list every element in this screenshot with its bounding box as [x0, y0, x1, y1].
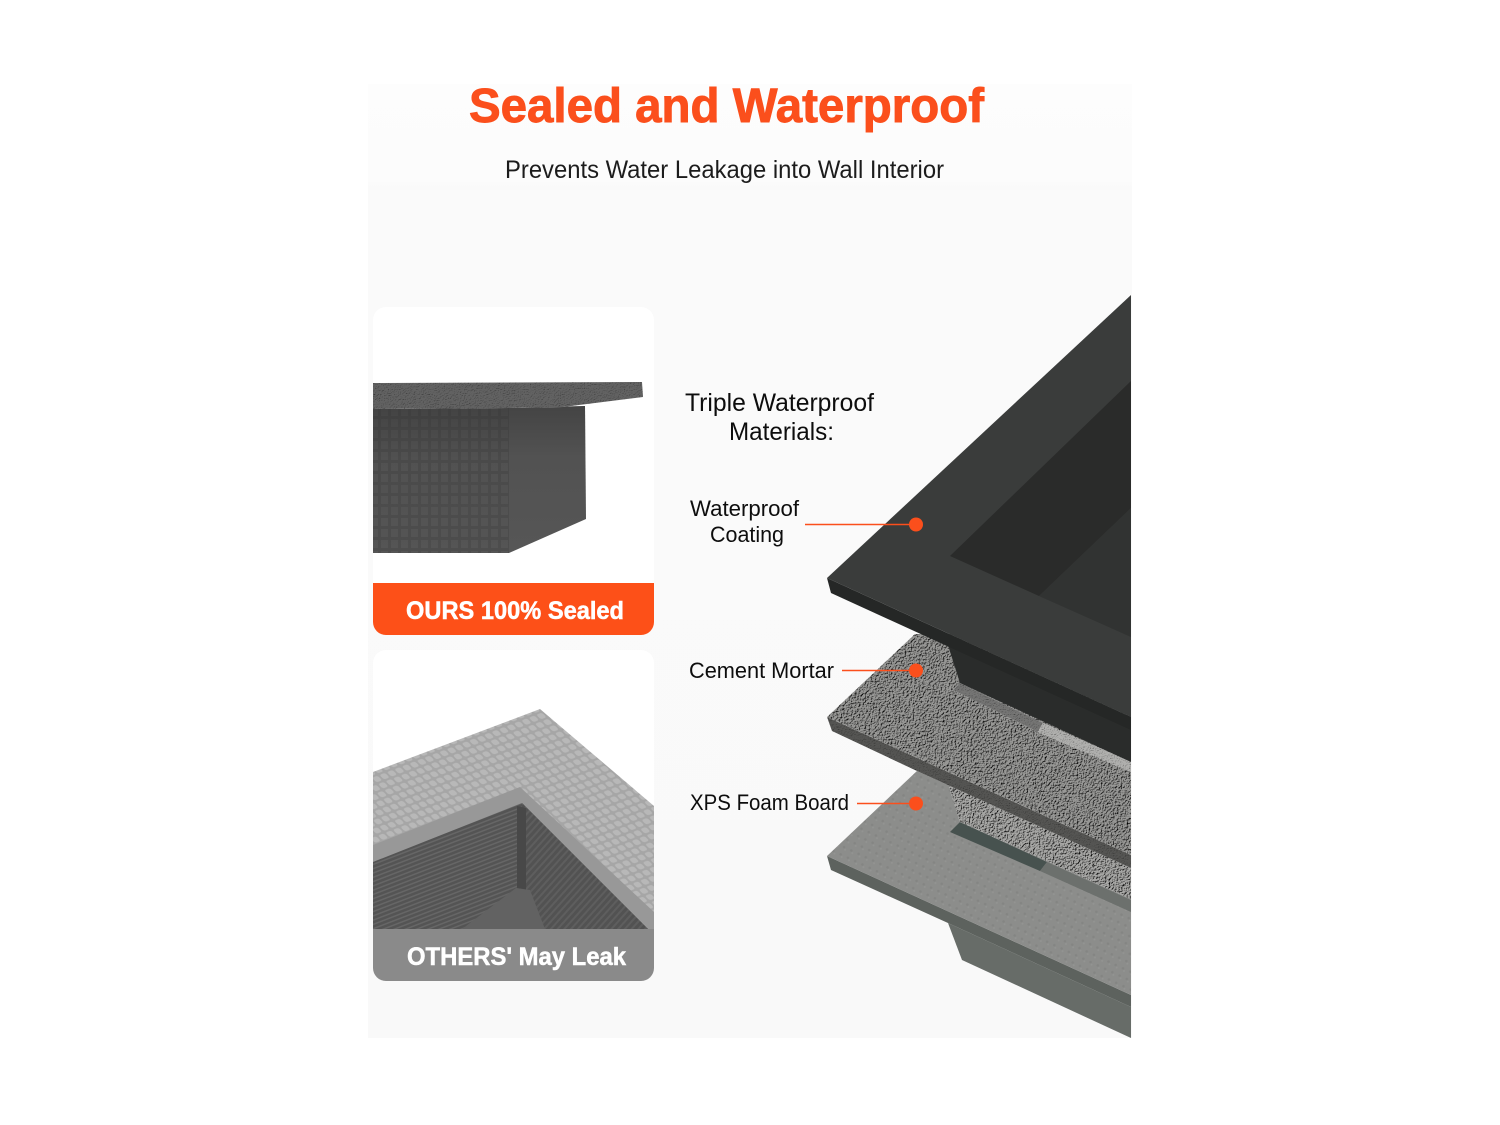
panel: others may leak	[373, 709, 654, 981]
grey caption bar	[373, 929, 654, 981]
exploded layer diagram	[827, 295, 1131, 1038]
heading: triple waterproof materials: Materials:	[729, 418, 834, 446]
orange caption bar	[373, 583, 654, 635]
callout: waterproof coating: Waterproof	[690, 496, 800, 521]
card background	[373, 650, 654, 981]
caption text: OURS 100% Sealed	[406, 597, 624, 625]
callout: cement mortar	[689, 658, 923, 683]
layer: cement mortar	[827, 634, 1131, 899]
product photo: sealed board	[373, 382, 643, 553]
callout: cement mortar: Cement Mortar	[689, 658, 834, 683]
panel: ours 100% sealed	[373, 382, 654, 635]
callout: waterproof coating	[690, 496, 923, 547]
heading: triple waterproof materials	[685, 389, 874, 446]
subtitle: Prevents Water Leakage into Wall Interior	[505, 156, 944, 184]
background panel	[368, 84, 1132, 1038]
product photo: unsealed board	[373, 709, 654, 930]
layer: waterproof coating	[827, 295, 1131, 762]
card background	[373, 307, 654, 635]
callout: xps foam board: XPS Foam Board	[690, 790, 849, 815]
layer: xps foam board	[827, 770, 1131, 1038]
callout: waterproof coating: Coating	[710, 522, 784, 547]
heading: triple waterproof materials: Triple Waterproof	[685, 389, 874, 417]
caption text: OTHERS' May Leak	[407, 943, 626, 971]
title: Sealed and Waterproof	[469, 80, 985, 133]
